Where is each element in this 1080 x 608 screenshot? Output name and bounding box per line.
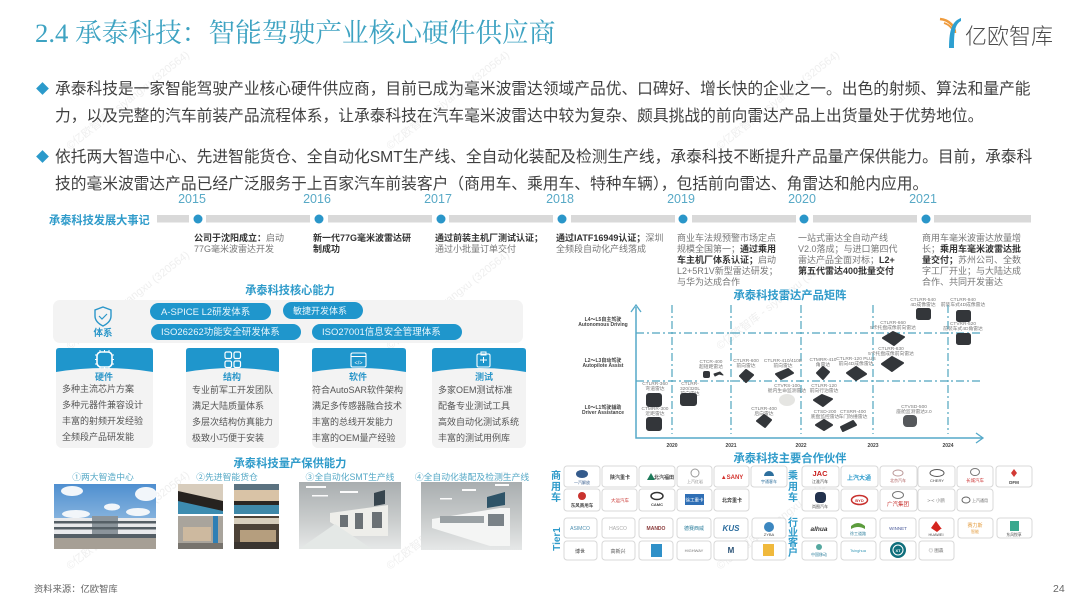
- photo captions: ④全自动化装配及检测生产线: [415, 471, 529, 482]
- logo marks: 陕汽重卡: [610, 474, 630, 481]
- matrix axis labels: L4～L5自主驾驶: [585, 316, 621, 323]
- matrix axis labels: [578, 316, 954, 449]
- product labels: CTLRR-660: [880, 320, 906, 326]
- logo marks: 德赛西威: [684, 525, 704, 532]
- logo marks: DFM: [1009, 480, 1019, 485]
- event 2019: L2+5R1V新型雷达研发；: [677, 266, 778, 276]
- logo marks: 上汽红岩: [687, 478, 703, 484]
- logo marks: 高新兴: [610, 548, 626, 555]
- category labels: 用: [551, 481, 561, 493]
- watermarks: ©亿欧智库 - siyangxu (320564): [63, 248, 192, 352]
- product labels: CTLRR-940: [950, 297, 976, 303]
- event 2015: 公司于沈阳成立：启动: [194, 233, 284, 243]
- event 2020: 雷达产品全面对标；L2+: [798, 255, 895, 265]
- source note: 资料来源：亿欧智库: [34, 584, 118, 594]
- watermarks: ©亿欧智库 - siyangxu (320564): [713, 48, 842, 152]
- matrix axis labels: Autonomous Driving: [578, 322, 628, 328]
- product labels: 5卡托盘成像前向雷达: [868, 350, 914, 357]
- event 2021: 商用车毫米波雷达放量增: [922, 233, 1021, 243]
- category labels: 行: [788, 516, 798, 529]
- photo: two manufacturing centres: [54, 484, 157, 549]
- bullet icon 1: [36, 82, 49, 95]
- card: testing: 测试: [475, 371, 493, 382]
- product labels: 超短距雷达: [699, 363, 723, 370]
- logo marks: XT: [895, 548, 901, 553]
- photo captions: ③全自动化SMT生产线: [306, 471, 395, 482]
- event 2021: 长；乘用车毫米波雷达批: [922, 244, 1021, 254]
- event 2017: 通过前装主机厂测试认证；: [435, 233, 543, 243]
- logo: 亿欧智库: [940, 18, 1053, 49]
- logo marks: JAC: [812, 469, 828, 478]
- product labels: CTLRR-120: [811, 383, 837, 389]
- event 2019: 车主机厂体系认证；启动: [677, 255, 776, 265]
- page number: 24: [1053, 583, 1065, 595]
- logo marks: CHERY: [930, 478, 944, 483]
- event 2017: 通过小批量订单交付: [435, 244, 516, 254]
- event 2015: [194, 233, 284, 254]
- product labels: 角雷达: [816, 361, 830, 368]
- event 2015: 77G毫米波雷达开发: [194, 244, 274, 254]
- product labels: 前向雷达: [773, 362, 793, 369]
- logo marks: 江淮汽车: [812, 478, 828, 484]
- card: hardware: 硬件: [95, 371, 113, 382]
- event 2018: 通过IATF16949认证；深圳: [556, 233, 663, 243]
- category labels: 客: [788, 536, 798, 549]
- matrix axis labels: L0～L1驾驶辅助: [585, 404, 621, 411]
- product labels: CTMRR-300: [642, 406, 669, 412]
- matrix axis labels: Autopilote Assist: [583, 363, 624, 369]
- product labels: CTLRR-120 PLUS: [836, 356, 876, 362]
- card: software: 丰富的OEM量产经验: [312, 432, 396, 443]
- product labels: CTCR-400: [700, 359, 723, 365]
- card: software: 丰富的总线开发能力: [312, 416, 393, 427]
- category labels: Tier1: [552, 527, 563, 551]
- matrix axis labels: 2022: [795, 443, 807, 449]
- logo marks: 上汽通用: [972, 497, 988, 503]
- heading: partners: 承泰科技主要合作伙伴: [734, 451, 846, 465]
- photo captions: ①两大智造中心: [72, 471, 134, 482]
- logo marks: 徐工道路: [850, 530, 866, 536]
- card: hardware: 丰富的射频开发经验: [62, 415, 143, 426]
- card: structure: [186, 348, 279, 448]
- event 2021: 字工厂开业；与大陆达成: [922, 266, 1021, 276]
- event 2020: V2.0落成；与进口第四代: [798, 244, 898, 254]
- event 2021: 量交付；苏州公司、全数: [922, 255, 1021, 265]
- logo marks: 北奔重卡: [722, 497, 742, 504]
- logo marks: ASIMCO: [570, 526, 590, 532]
- product labels: 座舱监测雷达2.0: [896, 408, 932, 415]
- system band: [53, 300, 523, 343]
- photo captions: [72, 471, 529, 482]
- logo marks: ◎ 图森: [929, 547, 944, 554]
- year 2020: 2020: [788, 192, 816, 206]
- white cabin radar: [779, 394, 795, 406]
- logo marks: 上汽大通: [847, 474, 871, 482]
- matrix axis labels: Driver Assistance: [582, 410, 624, 416]
- system band: 敏捷开发体系: [293, 305, 347, 316]
- event 2019: 规模全国第一；通过乘用: [677, 244, 776, 254]
- card: testing: 配备专业测试工具: [438, 400, 510, 411]
- watermarks: ©亿欧智库 - siyangxu (320564): [383, 248, 512, 352]
- logo marks: [570, 468, 1022, 558]
- category labels: 车: [788, 491, 798, 504]
- product labels: CTLRR-400: [751, 406, 777, 412]
- bullet text 2: 依托两大智造中心、先进智能货仓、全自动化SMT生产线、全自动化装配及检测生产线，承泰科技不断提升产品量产保供能力。目前，承泰科: [55, 149, 1032, 166]
- logo marks: 智能: [971, 528, 979, 534]
- matrix axis labels: 2021: [725, 443, 737, 449]
- event 2020: [798, 233, 898, 276]
- event 2019: [677, 233, 778, 287]
- photo: smart warehouse: [178, 484, 279, 549]
- logo: 亿欧智库: 亿欧智库: [965, 24, 1053, 49]
- product labels: CTVSD-500: [901, 404, 927, 410]
- photo: assembly and inspection line: [421, 482, 522, 550]
- product labels: 4D成像雷达: [910, 301, 936, 308]
- logo marks: MANDO: [647, 526, 666, 532]
- category labels: 业: [788, 526, 798, 539]
- logo marks: 北汽福田: [654, 474, 674, 481]
- category labels: 户: [788, 546, 798, 559]
- card: testing: [432, 348, 526, 448]
- logo marks: 赛力斯: [967, 522, 983, 529]
- matrix axis labels: 2024: [942, 443, 954, 449]
- logo marks: 长城汽车: [966, 477, 984, 484]
- product labels: 前装车式4D成像雷达: [941, 301, 985, 308]
- product labels: CTLRR-360: [642, 381, 668, 387]
- event 2021: [922, 233, 1021, 287]
- heading: core capabilities: 承泰科技核心能力: [245, 283, 335, 297]
- product labels: CTSRR-400: [840, 409, 866, 415]
- product labels: CTLRR-540: [910, 297, 936, 303]
- category labels: [551, 469, 798, 559]
- card: software: 软件: [349, 371, 367, 382]
- event 2020: 一站式雷达全自动产线: [798, 233, 888, 243]
- timeline heading: 承泰科技发展大事记: [49, 215, 150, 227]
- system band: ISO27001信息安全管理体系: [322, 326, 441, 338]
- logo marks: HIGHWAY: [685, 548, 704, 553]
- event 2019: 商业车法规预警市场定点: [677, 233, 776, 243]
- logo marks: M: [728, 546, 735, 555]
- matrix axis labels: L2～L3自动驾驶: [585, 357, 621, 364]
- watermarks: ©亿欧智库 - siyangxu (320564): [713, 468, 842, 572]
- system band: ISO26262功能安全研发体系: [161, 326, 280, 338]
- logo marks: 博世: [575, 548, 585, 555]
- product labels: 弯道雷达: [645, 385, 665, 392]
- matrix axis labels: 2023: [867, 443, 879, 449]
- product labels: CTSD-200: [814, 409, 837, 415]
- logo marks: 徐工重卡: [686, 496, 704, 504]
- product labels: CTLRR-600: [733, 358, 759, 364]
- logo marks: 岚图汽车: [812, 503, 828, 509]
- logo cards: [564, 466, 1032, 560]
- category labels: 乘: [788, 469, 798, 482]
- category labels: 车: [551, 491, 561, 504]
- product labels: 近距雷达: [645, 410, 665, 417]
- watermarks: ©亿欧智库 - siyangxu (320564): [713, 248, 842, 352]
- product labels: 底盘监控雷达: [811, 413, 840, 420]
- logo marks: 中国移动: [811, 551, 827, 557]
- logo marks: HASCO: [609, 526, 627, 532]
- product labels: 车门防撞雷达: [839, 413, 868, 420]
- card: testing: 多家OEM测试标准: [438, 384, 513, 395]
- year 2019: 2019: [667, 192, 695, 206]
- product labels: 前装车式4D角雷达: [943, 325, 983, 332]
- card: testing: 高效自动化测试系统: [438, 416, 519, 427]
- year 2017: 2017: [424, 192, 452, 206]
- event 2018: 全频段自动化产线落成: [556, 244, 646, 254]
- event 2017: [435, 233, 543, 254]
- card: structure: 多层次结构仿真能力: [192, 416, 273, 427]
- system band: A-SPICE L2研发体系: [161, 306, 250, 318]
- logo marks: 东风商用车: [571, 502, 594, 509]
- card: structure: 专业前军工开发团队: [192, 384, 273, 395]
- year 2016: 2016: [303, 192, 331, 206]
- matrix grid and axes: [631, 305, 983, 443]
- logo marks: alhua: [811, 526, 828, 533]
- logo marks: 东风悦享: [1006, 532, 1022, 537]
- logo marks: ≻≺ 小鹏: [927, 497, 945, 504]
- matrix axis labels: 2020: [666, 443, 678, 449]
- bullet text 1: 力，以及完整的汽车前装产品流程体系，让承泰科技在汽车毫米波雷达中较为复杂、颇具挑战的前向雷达产品上出货量处于优势地位。: [55, 108, 983, 125]
- card: structure: 极致小巧便于安装: [192, 432, 264, 443]
- logo marks: HUAWEI: [928, 533, 944, 537]
- category labels: 商: [551, 469, 561, 482]
- photo captions: ②先进智能货仓: [196, 471, 258, 482]
- product labels: CTMRR-410: [810, 357, 837, 363]
- category labels: 用: [788, 481, 798, 493]
- logo marks: CAMC: [651, 502, 663, 507]
- logo marks: Tsinghua: [850, 548, 867, 553]
- watermarks: ©亿欧智库 - siyangxu (320564): [63, 48, 192, 152]
- product labels: CTVRR-520: [950, 321, 976, 327]
- bullet text 2: [36, 148, 1032, 193]
- system band: 体系: [93, 327, 113, 339]
- logo marks: ▲SANY: [721, 475, 743, 481]
- card: testing: 丰富的测试用例库: [438, 432, 510, 443]
- logo marks: 广汽集团: [887, 500, 909, 508]
- event 2016: 制成功: [313, 244, 340, 254]
- bullet text 1: [36, 80, 1031, 125]
- event 2021: 合作、共同开发雷达: [922, 277, 1003, 287]
- year 2018: 2018: [546, 192, 574, 206]
- card: hardware: 多种主流芯片方案: [62, 383, 134, 394]
- card: software: [312, 348, 406, 448]
- photo: SMT line: [299, 482, 401, 549]
- product labels: 舱内生命监测雷达: [768, 387, 806, 394]
- logo marks: BYD: [855, 498, 864, 503]
- heading: radar matrix: 承泰科技雷达产品矩阵: [734, 288, 846, 302]
- product labels: 前向雷达: [680, 390, 700, 397]
- card: hardware: 全频段产品研发能: [62, 431, 134, 442]
- event 2020: 第五代雷达400批量交付: [798, 266, 894, 276]
- product labels: CTLRR-630: [878, 346, 904, 352]
- watermarks: ©亿欧智库 - siyangxu (320564): [63, 468, 192, 572]
- watermarks: ©亿欧智库 - siyangxu (320564): [383, 48, 512, 152]
- card: hardware: [56, 348, 153, 448]
- logo marks: 宇通客车: [761, 478, 777, 484]
- product labels: 前向雷达: [736, 362, 756, 369]
- logo marks: 北京汽车: [890, 477, 906, 483]
- product labels: 前向4D成像雷达: [839, 360, 874, 367]
- logo marks: ZYBA: [764, 532, 775, 537]
- logo marks: 一汽解放: [574, 479, 590, 485]
- logo marks: WINNET: [889, 526, 907, 531]
- product labels: 5卡托盘成像前向雷达: [870, 324, 916, 331]
- radar product images: [647, 309, 970, 431]
- watermarks: ©亿欧智库 - siyangxu (320564): [383, 468, 512, 572]
- title: 2.4 承泰科技：智能驾驶产业核心硬件供应商: [35, 18, 555, 48]
- product labels: 前向行泊雷达: [810, 387, 839, 394]
- product labels: 320/320L: [680, 386, 700, 392]
- product labels: CTVRS-100: [774, 383, 800, 389]
- card: structure: 结构: [223, 371, 241, 382]
- logo marks: 大运汽车: [611, 497, 629, 504]
- product labels: CTLRR-410/410E: [764, 358, 802, 364]
- event 2019: 与华为达成合作: [677, 277, 740, 287]
- card: software: 符合AutoSAR软件架构: [312, 384, 403, 395]
- product labels: CTLRR-: [681, 381, 699, 387]
- event 2018: [556, 233, 663, 254]
- year 2015: 2015: [178, 192, 206, 206]
- bullet text 2: 技的毫米波雷达产品已经广泛服务于上百家汽车前装客户（商用车、乘用车、特种车辆），包括前向雷达、角雷达和舱内应用。: [55, 176, 928, 193]
- product labels: 后向雷达: [754, 410, 774, 417]
- logo marks: KUS: [723, 524, 740, 533]
- event 2016: 新一代77G毫米波雷达研: [313, 233, 411, 243]
- heading: mass production: 承泰科技量产保供能力: [234, 456, 346, 470]
- card: structure: 满足大陆质量体系: [192, 400, 264, 411]
- year 2021: 2021: [909, 192, 937, 206]
- bullet text 1: 承泰科技是一家智能驾驶产业核心硬件供应商，目前已成为毫米波雷达领域产品优、口碑好、增长快的企业之一。出色的射频、算法和量产能: [55, 81, 1031, 98]
- event 2016: [313, 233, 411, 254]
- product labels: [642, 297, 985, 420]
- card: hardware: 多种元器件兼容设计: [62, 399, 143, 410]
- card: software: </>: [355, 360, 362, 366]
- bullet icon 2: [36, 150, 49, 163]
- card: software: 满足多传感器融合技术: [312, 400, 402, 411]
